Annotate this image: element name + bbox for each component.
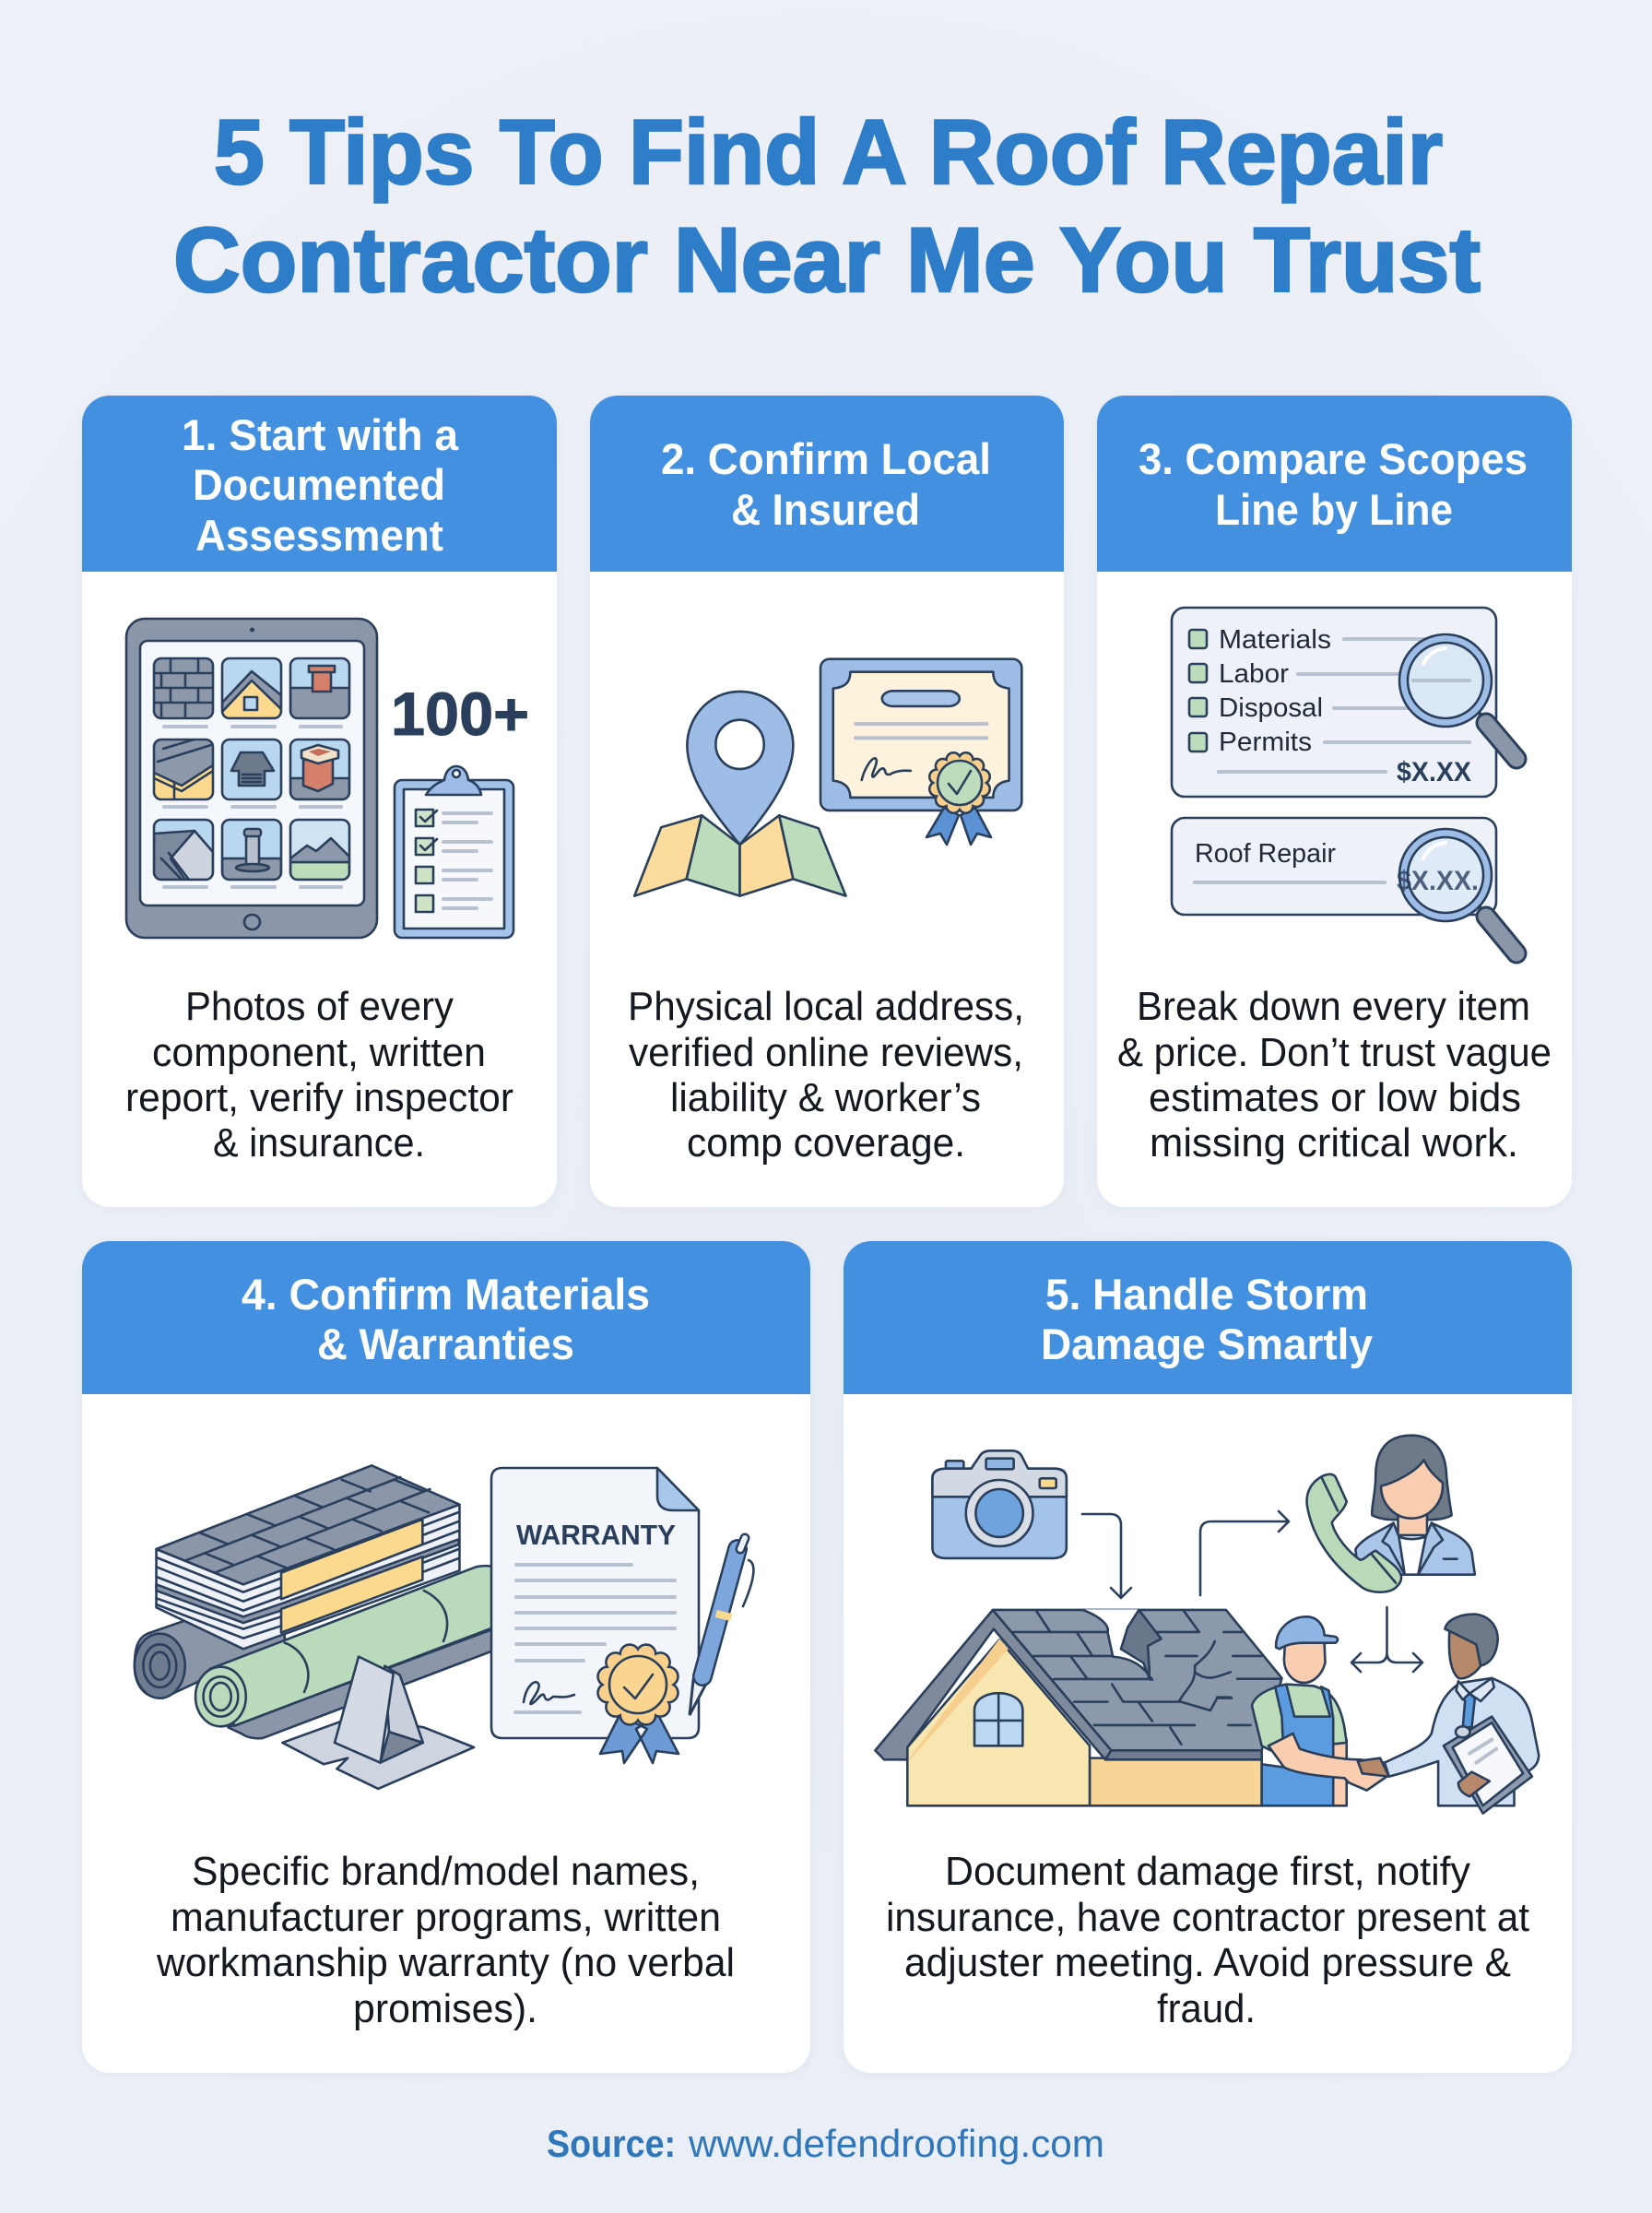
text: tip 4 body — [156, 1849, 735, 2031]
heading: tip 2: 2. Confirm Local — [661, 434, 991, 483]
text: tip 3 body: & price. Don’t trust vague — [1117, 1030, 1552, 1075]
heading: tip 2 — [590, 396, 1064, 572]
text: tip 3 body: missing critical work. — [1150, 1120, 1518, 1166]
text: tip 4 body: workmanship warranty (no verbal — [156, 1940, 735, 1985]
icon: map with location pin — [634, 692, 846, 896]
text: tip 2 body: verified online reviews, — [629, 1030, 1023, 1075]
icon: shingles, rolls and flashing — [135, 1465, 493, 1789]
text: tip 5 body — [886, 1849, 1529, 2031]
heading: tip 4: 4. Confirm Materials — [242, 1270, 650, 1319]
icon: itemized estimate with magnifier: Materials — [1219, 625, 1331, 655]
icon: vague estimate with magnifier: Roof Repair — [1195, 839, 1336, 869]
icon: pen — [690, 1538, 753, 1715]
icon: itemized estimate with magnifier: Disposal — [1219, 693, 1323, 723]
icon: warranty document — [491, 1468, 699, 1738]
arrow: camera to roof — [1082, 1514, 1131, 1598]
panel: tip 3 compare scopes — [1097, 396, 1572, 1207]
heading: tip 1: 1. Start with a — [182, 410, 459, 459]
icon: itemized estimate with magnifier — [1172, 608, 1516, 797]
text: tip 2 body: comp coverage. — [687, 1120, 965, 1166]
text: tip 1 body: Photos of every — [185, 984, 454, 1029]
heading: tip 3 — [1097, 396, 1572, 572]
icon: gold warranty seal — [598, 1645, 678, 1763]
icon: vague estimate with magnifier — [1172, 818, 1516, 953]
text: tip 1 body: report, verify inspector — [125, 1075, 513, 1120]
panel: tip 1 documented assessment — [82, 396, 557, 1207]
text: tip 2 body: Physical local address, — [628, 984, 1024, 1029]
heading: tip 5: 5. Handle Storm — [1045, 1270, 1368, 1319]
text: tip 2 body: liability & worker’s — [670, 1075, 981, 1120]
title: 5 Tips To Find A Roof Repair — [214, 101, 1443, 203]
heading: tip 5: Damage Smartly — [1041, 1320, 1373, 1368]
icon: vague estimate with magnifier: $X.XX. — [1397, 866, 1479, 896]
text: tip 3 body — [1117, 984, 1552, 1166]
text: tip 4 body: Specific brand/model names, — [192, 1849, 700, 1894]
heading: tip 2: & Insured — [731, 485, 920, 534]
icon: clipboard checklist — [395, 766, 513, 938]
stat: 100+: 100+ — [391, 680, 529, 748]
panel: tip 4 materials and warranties — [82, 1241, 810, 2073]
icon: tablet with roof photos — [126, 619, 377, 938]
text: tip 1 body: & insurance. — [213, 1120, 425, 1166]
panel: tip 2 confirm local and insured — [590, 396, 1064, 1207]
panel: tip 5 storm damage — [844, 1241, 1572, 2073]
source credit: Source: — [547, 2122, 676, 2165]
text: tip 1 body: component, written — [152, 1030, 486, 1075]
icon: house with damaged roof — [875, 1609, 1281, 1805]
text: tip 4 body: promises). — [353, 1986, 537, 2031]
heading: tip 5 — [844, 1241, 1572, 1394]
icon: itemized estimate with magnifier: Labor — [1219, 659, 1289, 689]
text: tip 5 body: adjuster meeting. Avoid pressure & — [904, 1940, 1511, 1985]
text: tip 4 body: manufacturer programs, written — [171, 1895, 721, 1940]
icon: insurance agent on phone — [1307, 1436, 1475, 1592]
text: tip 2 body — [628, 984, 1024, 1166]
title: Contractor Near Me You Trust — [173, 208, 1481, 311]
heading: tip 3: Line by Line — [1215, 485, 1453, 534]
icon: camera — [932, 1450, 1067, 1558]
heading: tip 1: Assessment — [195, 511, 443, 560]
icon: insurance adjuster with clipboard — [1358, 1615, 1539, 1814]
source credit: www.defendroofing.com — [688, 2122, 1104, 2165]
heading: tip 4 — [82, 1241, 810, 1394]
heading: tip 1: Documented — [193, 460, 445, 509]
text: tip 5 body: Document damage first, notify — [945, 1849, 1470, 1894]
icon: certificate with seal — [820, 659, 1021, 845]
title — [173, 101, 1481, 311]
text: tip 5 body: insurance, have contractor present at — [886, 1895, 1529, 1940]
text: tip 5 body: fraud. — [1157, 1986, 1256, 2031]
text: tip 3 body: estimates or low bids — [1149, 1075, 1521, 1120]
text: tip 1 body — [125, 984, 513, 1166]
icon: warranty document: WARRANTY — [516, 1519, 676, 1551]
heading: tip 4: & Warranties — [317, 1320, 574, 1368]
heading: tip 1 — [82, 396, 557, 572]
icon: itemized estimate with magnifier: $X.XX — [1397, 757, 1471, 787]
icon: contractor shaking hands — [1252, 1616, 1386, 1805]
arrow: split between contractor and adjuster — [1351, 1607, 1422, 1672]
heading: tip 3: 3. Compare Scopes — [1139, 434, 1528, 483]
icon: itemized estimate with magnifier: Permits — [1219, 728, 1312, 757]
text: tip 3 body: Break down every item — [1137, 984, 1530, 1029]
arrow: roof to insurance — [1200, 1511, 1289, 1595]
